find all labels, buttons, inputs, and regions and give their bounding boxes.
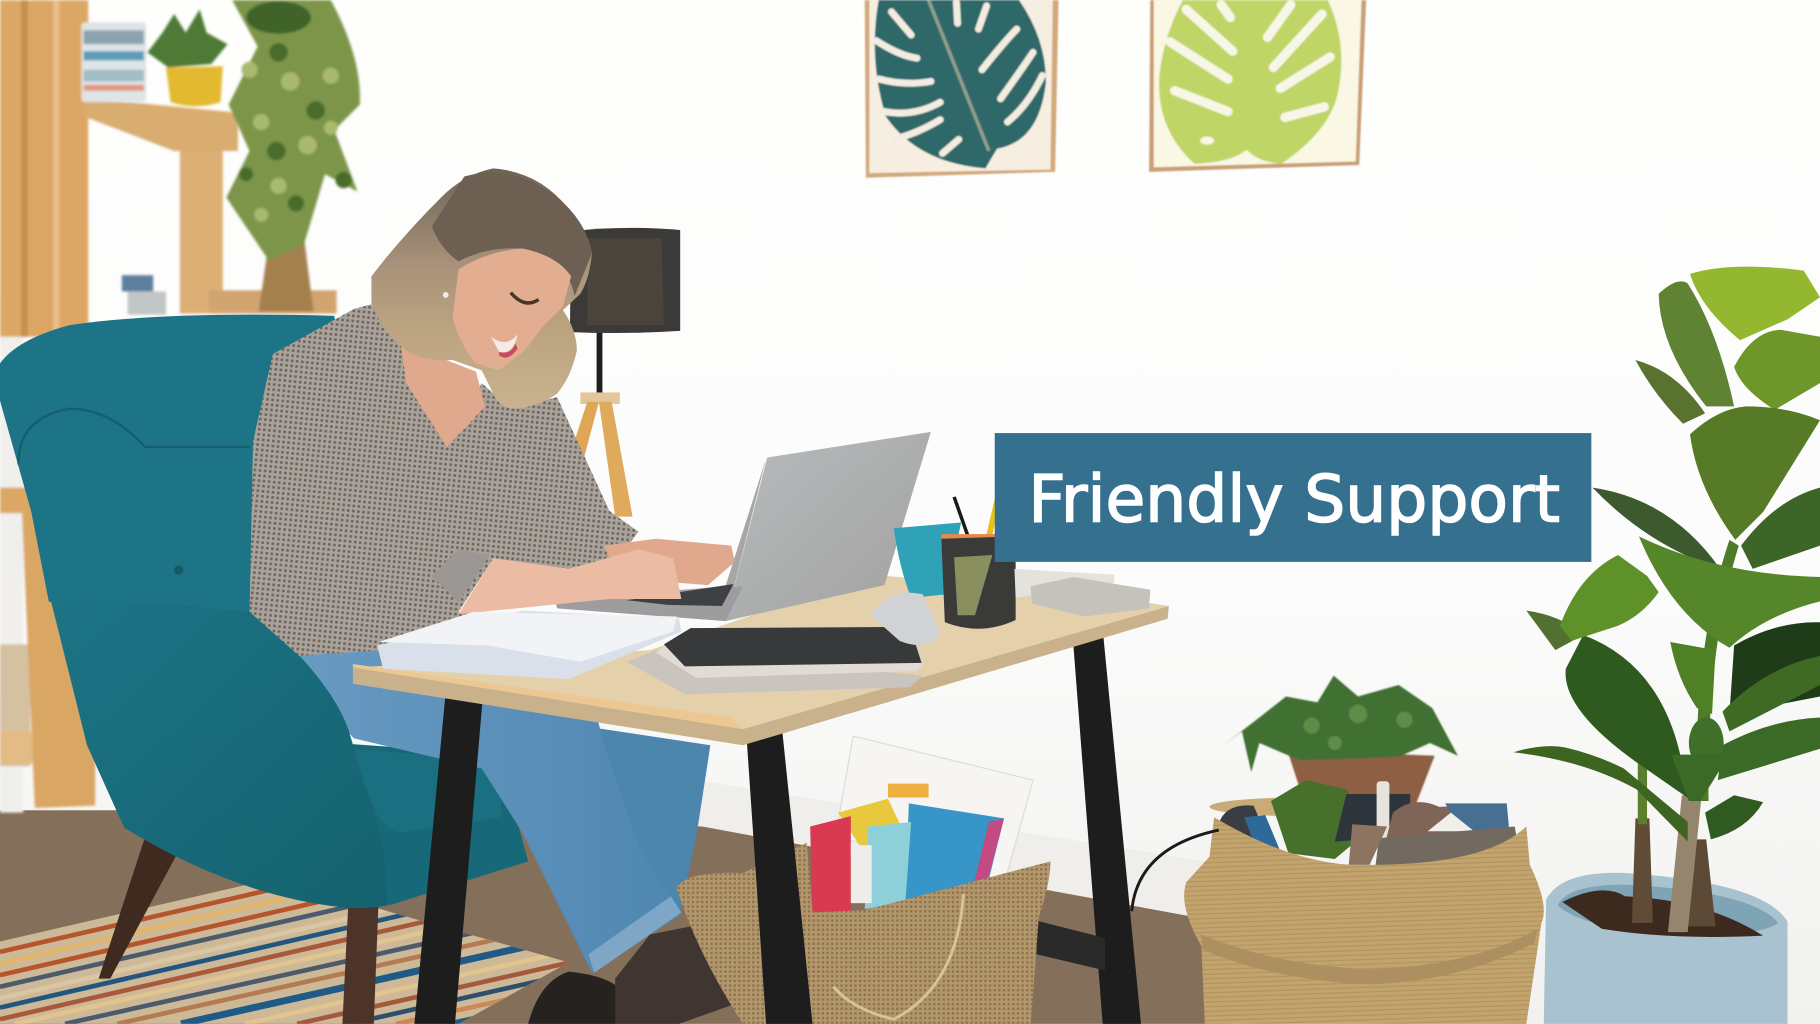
chair front leg [342,905,378,1024]
near shoe [615,925,743,1024]
blouse [250,304,638,656]
main leaves [1659,281,1734,406]
potted plant on shelf [147,9,228,106]
far shoe [528,972,618,1024]
open notebook [377,611,681,679]
woman [250,168,743,1024]
wall art: dark teal leaf [865,0,1059,178]
chair back [0,315,348,697]
pencil holder [941,497,1017,629]
stems [1696,540,1739,801]
floor lamp [569,228,680,517]
blue plant pot [1544,873,1788,1024]
armchair arm [49,592,388,908]
seat cushion [348,749,501,832]
forearm [458,549,681,614]
wall art: lime leaf [1149,0,1366,172]
baseboard [696,780,1207,919]
blue mug [894,522,961,598]
chair lower panel [337,743,528,905]
fabric box on desk [1014,569,1150,616]
far hand [604,539,735,585]
arms and hands on keyboard [432,539,735,614]
basket body [1184,817,1544,1024]
under-desk wicker basket [677,731,1050,1024]
small frame on shelf [122,275,166,315]
sleeve cuff [432,549,490,603]
heading text: Friendly Support [1028,462,1560,537]
rug [0,885,568,1024]
far leg [580,726,710,917]
face [453,249,571,370]
chair button [174,565,183,575]
chair rear leg [99,837,180,979]
dark background leaves [1592,488,1720,569]
papers in basket [836,736,1033,885]
thigh and near leg [279,615,679,973]
smile [491,334,518,352]
tablet stack [627,627,923,694]
trunks [1632,818,1653,923]
earring [443,292,449,298]
chair inner seam [19,409,250,464]
hair [371,168,592,409]
basket contents [1209,798,1391,816]
fiddle-leaf plant [1514,267,1820,932]
desk top [353,575,1169,745]
books on shelf [81,22,146,102]
wooden shelving unit [0,0,337,813]
hanging plant [226,0,360,311]
rope basket with items [1132,780,1544,1024]
jeans hem [588,896,681,973]
eye [511,293,539,303]
dark hair on crown [432,172,592,296]
desk dome object [871,593,940,645]
heading banner [995,433,1591,562]
desk legs [414,629,1141,1024]
dark left leaf [1566,635,1692,801]
floor [0,810,1230,1024]
small fern plant [1223,676,1458,807]
neck skin [400,343,485,447]
armchair back and seat [0,315,528,1024]
laptop [555,432,931,621]
